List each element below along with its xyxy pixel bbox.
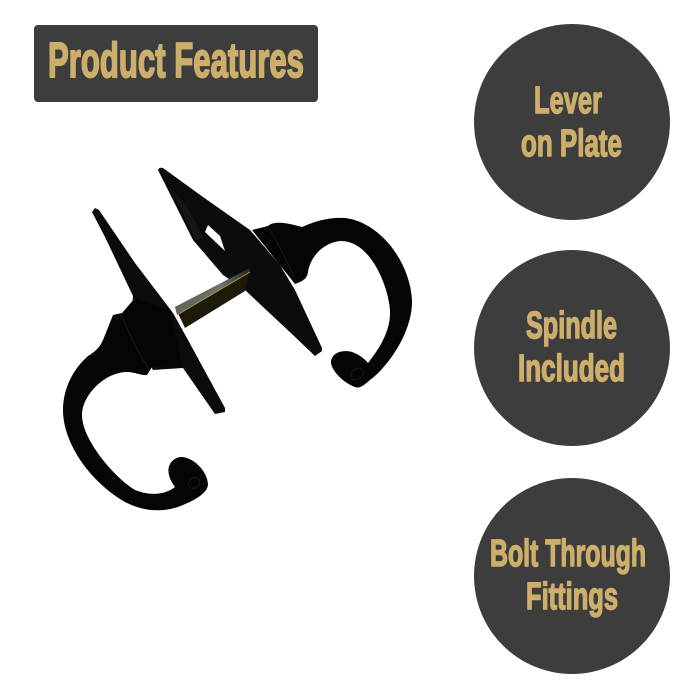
heading: Product Features: Product Features (48, 34, 304, 88)
feature circle: Spindle Included: Included (518, 348, 625, 390)
feature circle: Spindle Included (474, 250, 670, 446)
feature circle: Lever on Plate: on Plate (521, 123, 622, 165)
right hook (252, 218, 412, 388)
right plate recess (172, 190, 204, 240)
product photo: black lever handles on plates with spindle (63, 168, 412, 510)
feature circle: Spindle Included: Spindle (526, 305, 617, 347)
right plate (158, 168, 322, 356)
spindle (175, 268, 250, 328)
knob and collar details (121, 226, 366, 491)
feature circle: Bolt Through Fittings (474, 478, 670, 674)
left hook (63, 298, 208, 510)
feature circle: Lever on Plate (474, 24, 670, 220)
left back plate (92, 208, 225, 414)
feature circle: Lever on Plate: Lever (534, 80, 602, 122)
feature circle: Bolt Through Fittings: Fittings (526, 576, 618, 618)
heading: Product Features (34, 25, 318, 102)
